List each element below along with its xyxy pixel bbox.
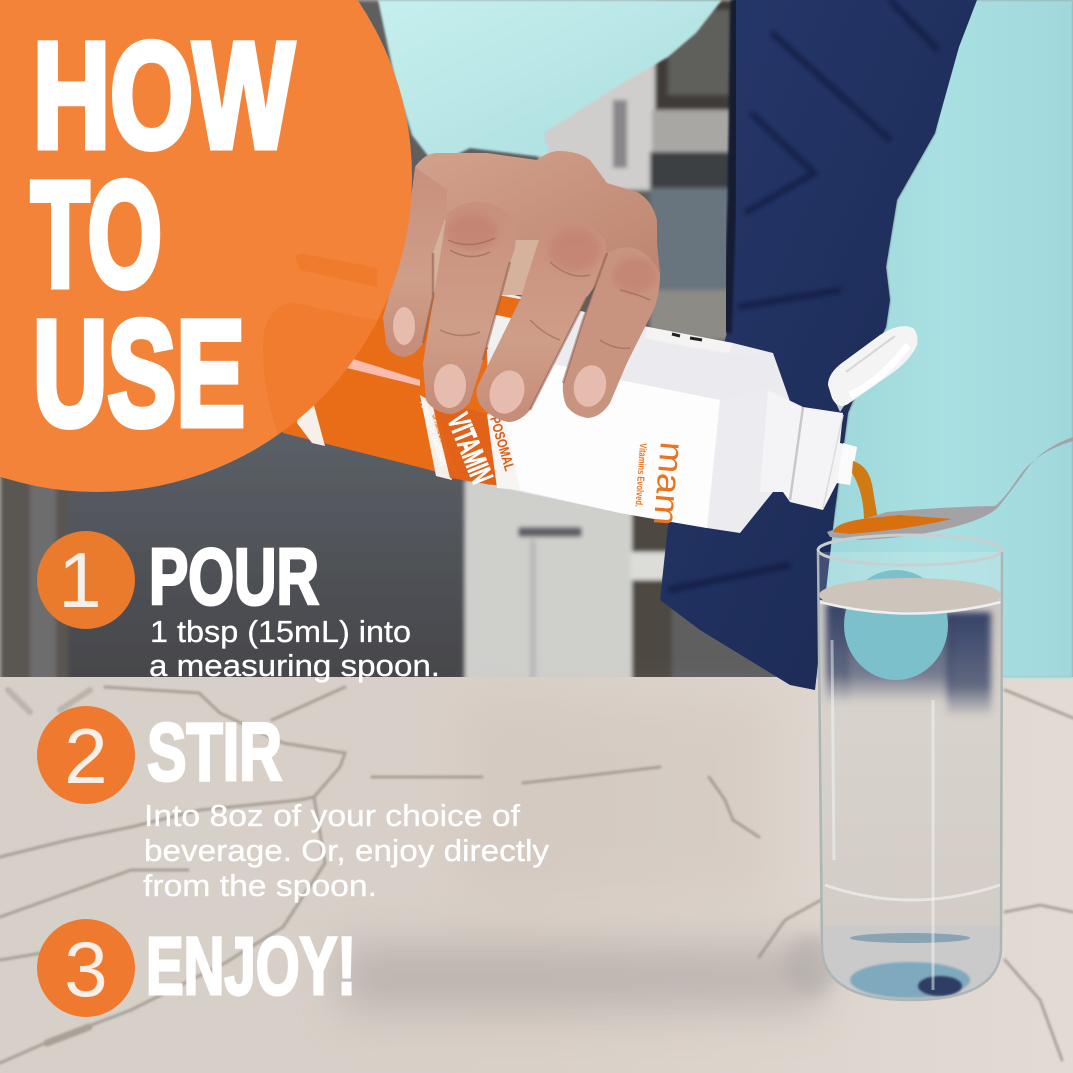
step 2 badge (37, 706, 135, 804)
marble counter (0, 677, 1073, 1073)
spoon (827, 437, 1073, 540)
step 1 text (149, 614, 440, 683)
vitamin block: POSOMAL (487, 414, 518, 473)
brand text: mam (646, 440, 691, 527)
orange title circle (0, 0, 412, 492)
title: how to use: TO (31, 150, 162, 318)
title: how to use (31, 11, 294, 457)
bottle body (430, 275, 792, 533)
finger 1 (383, 167, 447, 357)
bottle (263, 258, 918, 533)
step 3 heading: ENJOY! (146, 921, 356, 1012)
step 2 text: beverage. Or, enjoy directly (144, 833, 550, 868)
glass shadow (786, 935, 838, 995)
vitamin block: VITAMIN (441, 409, 500, 488)
navy vest (660, 0, 977, 690)
marble veins (0, 687, 1073, 1063)
title: how to use: USE (33, 289, 245, 457)
brand text (633, 440, 691, 527)
water glass (786, 535, 1005, 1005)
fingernails (393, 307, 610, 418)
step 1 text: a measuring spoon. (149, 648, 440, 683)
finger 3 (476, 219, 607, 422)
step 1 badge (37, 531, 135, 629)
teal shirt (810, 0, 1073, 678)
step 1 heading: POUR (149, 532, 319, 621)
flip cap (828, 326, 918, 412)
bottle seen through circle (263, 254, 378, 434)
bottle neck (760, 390, 857, 510)
vitamin block: POWERED BY NANOSOMES (418, 400, 448, 468)
step 2: stir (37, 706, 550, 903)
step 2 text: Into 8oz of your choice of (144, 798, 520, 833)
step 1: pour (37, 531, 440, 683)
hand (383, 151, 660, 422)
bottle label panel (505, 352, 720, 528)
top label strip (620, 327, 782, 400)
finger separation shadows (423, 253, 607, 410)
finger 2 (423, 202, 516, 414)
finger 4 (563, 247, 660, 418)
step 1 text: 1 tbsp (15mL) into (150, 614, 411, 649)
title: how to use: HOW (33, 11, 294, 179)
brand text: Vitamins Evolved. (633, 443, 648, 508)
step 1 badge: 1 (58, 536, 102, 624)
step 3 badge (37, 919, 135, 1017)
knuckle tones (446, 214, 657, 293)
sleeve (378, 0, 722, 165)
white label stripes (297, 312, 520, 480)
step 2 text (143, 798, 550, 903)
syrup stream (852, 461, 878, 522)
glass contents (815, 535, 1005, 1005)
step 3: enjoy (37, 919, 356, 1017)
step 2 text: from the spoon. (143, 868, 377, 903)
step 2 badge: 2 (64, 712, 108, 800)
step 2 heading: STIR (147, 707, 282, 798)
vitamin block: OPTIMAL BIOAVAILABILITY (430, 413, 457, 473)
back of hand (415, 151, 660, 273)
vitamin block (418, 398, 520, 490)
kitchen background (0, 0, 1073, 690)
knuckle creases (440, 238, 650, 348)
palm in the gap (430, 215, 545, 300)
orange label (263, 258, 525, 485)
step 3 badge: 3 (64, 925, 108, 1013)
